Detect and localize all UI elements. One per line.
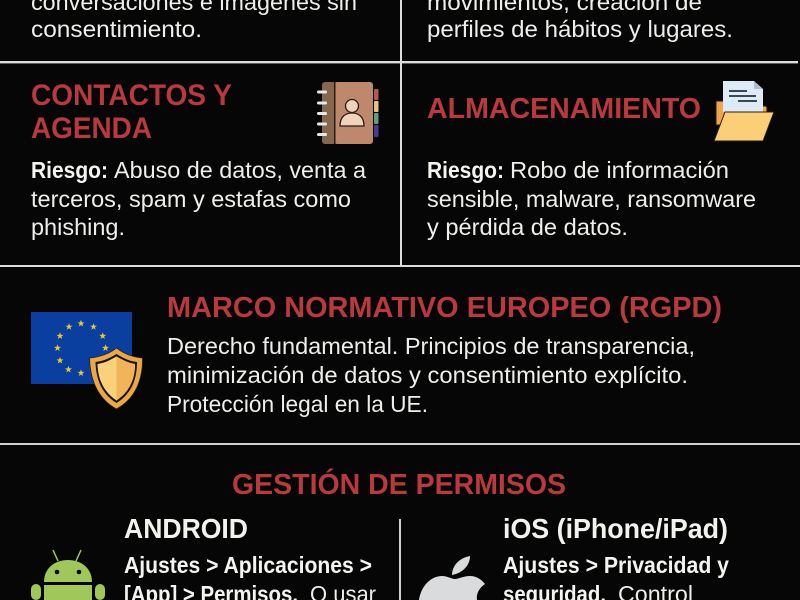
heading: contactos y agenda: CONTACTOS Y [31,79,232,112]
text block: marco normativo: Protección legal en la UE. [167,391,428,417]
panel: contactos y agenda [31,79,378,240]
risk text: contactos: Abuso de datos, venta a [114,157,367,183]
risk text: contactos: phishing. [31,214,125,240]
subheading: android: ANDROID [124,513,248,544]
risk text: almacenamiento: sensible, malware, ransomware [427,186,756,212]
risk text: contactos: terceros, spam y estafas como [31,186,351,212]
icon: folder with document [714,81,774,141]
text block: android steps: Ajustes > Aplicaciones > [124,552,372,578]
text block: ios steps [503,552,729,600]
heading: contactos y agenda [31,79,232,145]
panel: ubicación risk text (cropped): perfiles de hábitos y lugares. [427,16,733,42]
heading: marco normativo: MARCO NORMATIVO EUROPEO (RGPD) [167,292,722,324]
risk text: almacenamiento: Riesgo: [427,157,504,183]
text block: ios steps: Ajustes > Privacidad y [503,552,729,578]
panel: marco normativo europeo [31,292,722,417]
panel: cámara y micrófono risk text (cropped): consentimiento. [31,16,202,42]
panel: android [31,513,376,600]
subheading: ios: iOS (iPhone/iPad) [503,513,728,544]
risk text: almacenamiento: Robo de información [510,157,729,183]
risk text: contactos [31,157,367,240]
panel: ubicación risk text (cropped) [427,0,733,42]
text block: marco normativo: minimización de datos y consentimiento explícito. [167,362,688,388]
risk text: almacenamiento [427,157,756,240]
text block: android steps [124,552,376,600]
risk text: contactos: Riesgo: [31,157,108,183]
risk text: almacenamiento: y pérdida de datos. [427,214,628,240]
heading: contactos y agenda: AGENDA [31,112,152,145]
text block: marco normativo [167,333,695,417]
icon: address book [317,82,378,144]
icon: EU flag with shield [31,312,143,409]
heading: gestión de permisos: GESTIÓN DE PERMISOS [232,467,566,501]
text block: marco normativo: Derecho fundamental. Principios de transparencia, [167,333,695,359]
panel: ios [419,513,729,600]
panel: almacenamiento [427,81,774,240]
panel: cámara y micrófono risk text (cropped) [31,0,357,42]
icon: apple logo [419,556,485,600]
icon: android robot [31,550,105,600]
heading: almacenamiento: ALMACENAMIENTO [427,93,701,125]
